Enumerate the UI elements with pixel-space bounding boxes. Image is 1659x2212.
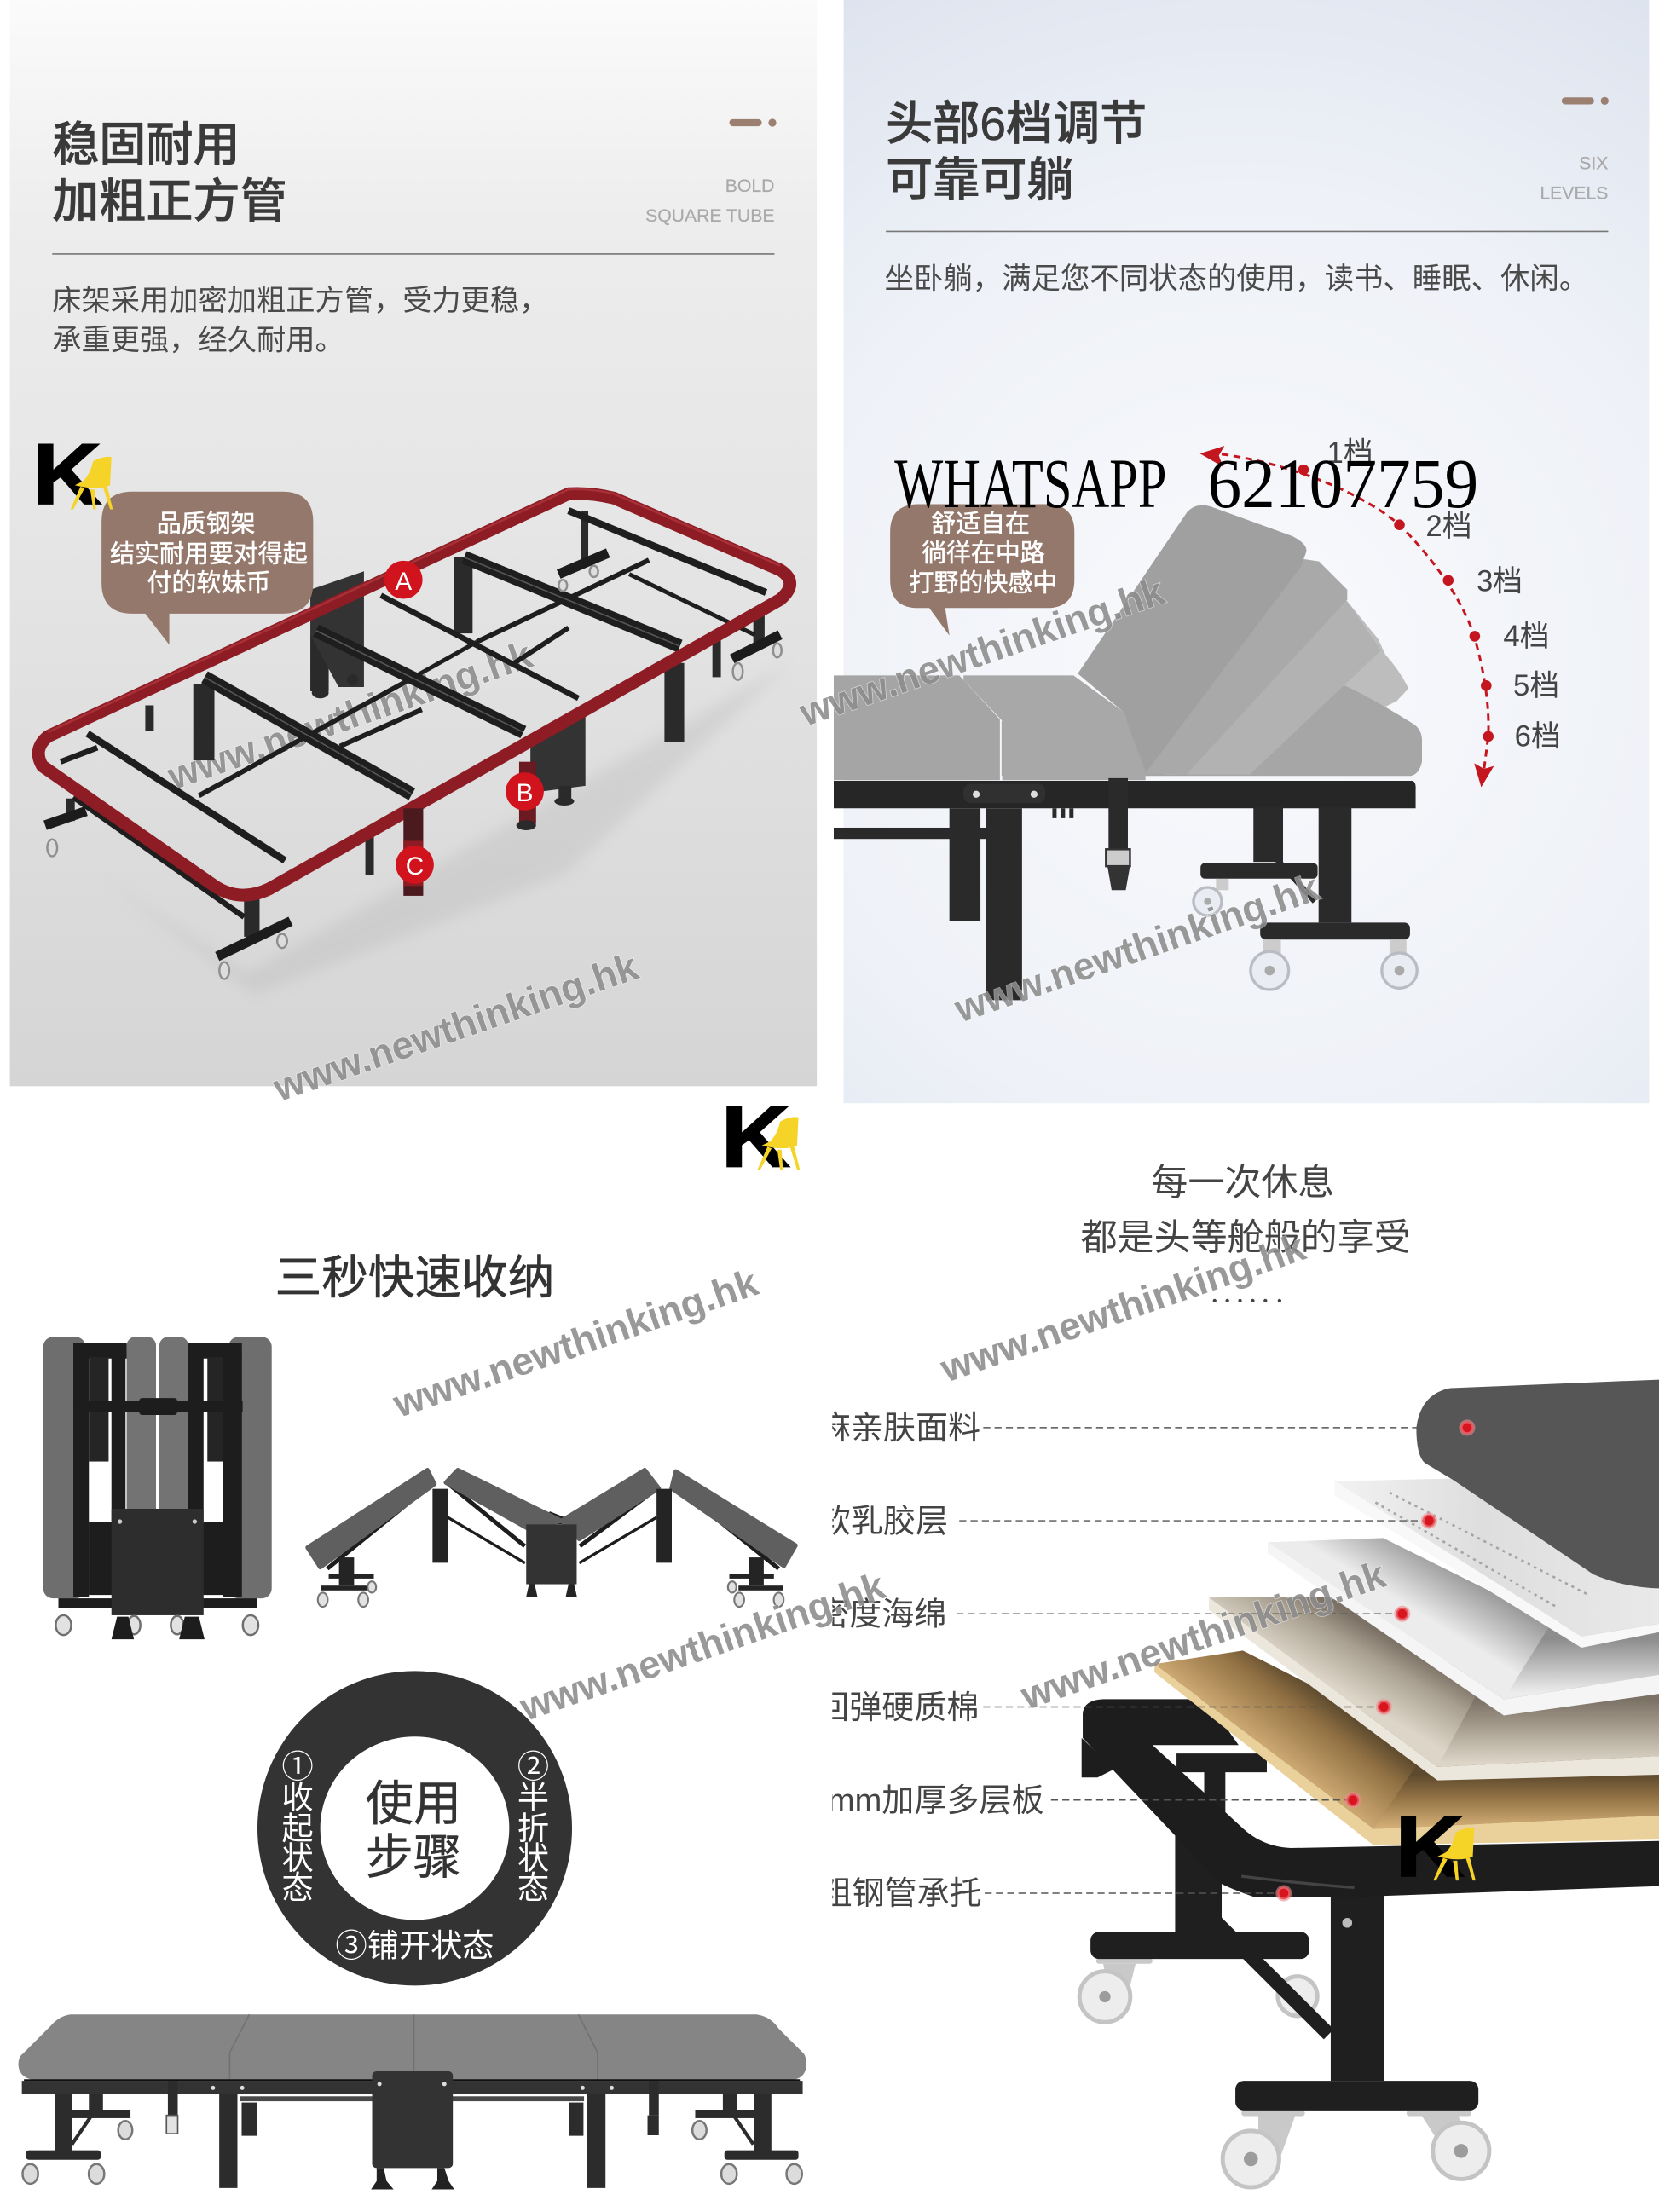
description text: 坐卧躺，满足您不同状态的使用，读书、睡眠、休闲。 <box>885 263 1588 295</box>
fabric cushion layer <box>1416 1380 1659 1589</box>
english subtitle <box>645 176 774 226</box>
step 2: 状 <box>517 1840 549 1876</box>
layer labels: 高密度海绵 <box>784 1597 946 1633</box>
marker B: B <box>517 779 534 807</box>
step 1: 态 <box>282 1870 314 1906</box>
heading: 6 level headrest: 头部6档调节 <box>886 97 1147 150</box>
watermarks: www.newthinking.hk <box>514 1563 891 1730</box>
description text: 承重更强，经久耐用。 <box>52 324 344 356</box>
heading: 6 level headrest <box>886 97 1147 206</box>
level labels: 5档 <box>1513 669 1559 702</box>
ring centre text: 使用 <box>366 1776 461 1830</box>
layer labels: 亚麻亲肤面料 <box>786 1411 980 1447</box>
speech bubble: quality steel frame: 品质钢架 <box>157 511 255 538</box>
panel: mattress layers <box>784 1163 1659 2187</box>
heading: first class rest: 每一次休息 <box>1151 1163 1334 1204</box>
marker C: C <box>406 852 424 881</box>
marker C <box>396 846 434 884</box>
accent mark <box>730 118 777 127</box>
heading: sturdy square tube: 稳固耐用 <box>52 118 240 171</box>
speech bubble: comfort <box>890 504 1074 636</box>
marker B <box>506 772 544 811</box>
step 2: 态 <box>517 1870 549 1906</box>
wood board layer <box>1154 1650 1659 1845</box>
layer labels <box>832 1412 1043 1908</box>
step 1: 状 <box>282 1840 314 1876</box>
speech bubble: comfort: 打野的快感中 <box>910 569 1057 597</box>
heading: three second storage: 三秒快速收纳 <box>275 1252 554 1304</box>
watermarks: www.newthinking.hk <box>267 944 644 1110</box>
description text <box>52 285 548 356</box>
frame and casters <box>1079 1699 1659 2187</box>
foam layer <box>1268 1538 1659 1715</box>
step 2: 半 <box>517 1780 549 1816</box>
level labels: 2档 <box>1425 510 1471 543</box>
layer labels: 15mm加厚多层板 <box>792 1783 1044 1819</box>
heading: 6 level headrest: 可靠可躺 <box>886 153 1074 206</box>
watermarks: www.newthinking.hk <box>387 1260 764 1426</box>
watermark behind frame: www.newthinking.hk <box>161 632 538 799</box>
ring centre text: 步骤 <box>366 1830 461 1884</box>
watermarks <box>267 569 1391 1730</box>
watermarks: www.newthinking.hk <box>794 569 1171 735</box>
level labels: 1档 <box>1327 436 1373 470</box>
level labels: 3档 <box>1477 564 1523 598</box>
step 2 <box>517 1748 549 1906</box>
logo: K chair: K <box>1396 1799 1465 1895</box>
flat open bed illustration <box>19 2014 806 2190</box>
english subtitle: BOLD <box>725 176 774 196</box>
step 2: ② <box>517 1748 549 1784</box>
step 1: 收 <box>282 1780 314 1816</box>
watermarks: www.newthinking.hk <box>1014 1552 1391 1718</box>
marker A <box>384 561 423 599</box>
accent mark <box>1562 97 1609 105</box>
dashed leader lines <box>957 1428 1467 1893</box>
level labels: 6档 <box>1515 719 1561 753</box>
step 1: 起 <box>282 1811 314 1846</box>
speech bubble: comfort: 舒适自在 <box>931 511 1030 538</box>
whatsapp contact text: 62107759 <box>1207 444 1478 523</box>
speech bubble: comfort: 徜徉在中路 <box>922 540 1045 568</box>
speech bubble: quality steel frame: 结实耐用要对得起 <box>110 541 308 569</box>
logo: K chair: K <box>721 1090 790 1186</box>
watermarks: www.newthinking.hk <box>934 1225 1311 1391</box>
step 1 <box>282 1748 314 1906</box>
panel: quick folding <box>19 1090 806 2190</box>
english subtitle <box>1540 154 1608 203</box>
red steel bed frame <box>38 489 790 995</box>
folded bed illustration <box>43 1337 272 1639</box>
description text: 床架采用加密加粗正方管，受力更稳， <box>52 285 548 317</box>
heading: sturdy square tube <box>52 118 287 228</box>
step 2: 折 <box>517 1811 549 1846</box>
cotton layer <box>1209 1597 1659 1781</box>
heading: first class rest <box>1081 1163 1411 1258</box>
marker A: A <box>395 568 412 596</box>
heading: sturdy square tube: 加粗正方管 <box>52 175 287 228</box>
layer labels: 柔软乳胶层 <box>786 1504 948 1539</box>
heading: first class rest: 都是头等舱般的享受 <box>1081 1217 1411 1258</box>
latex layer <box>1334 1478 1659 1648</box>
step 3: ③铺开状态 <box>335 1927 494 1963</box>
speech bubble: quality steel frame: 付的软妹币 <box>147 569 270 597</box>
speech bubble: quality steel frame <box>101 492 313 644</box>
usage steps ring <box>257 1671 572 1985</box>
half folded bed illustration <box>308 1470 795 1607</box>
ring centre text <box>366 1776 461 1884</box>
panel: bold square tube <box>10 0 817 1086</box>
layer labels: 加粗钢管承托 <box>787 1876 982 1912</box>
whatsapp contact text <box>894 444 1478 523</box>
side view bed with reclining headrest <box>834 505 1422 1000</box>
logo: K chair: K <box>32 427 101 523</box>
panel: six levels headrest <box>834 0 1649 1103</box>
step 1: ① <box>282 1748 314 1784</box>
layer labels: 高回弹硬质棉 <box>784 1690 979 1726</box>
red dashed adjustment arrow <box>1200 446 1494 787</box>
level labels: 4档 <box>1503 620 1549 653</box>
ellipsis dots <box>1213 1299 1281 1302</box>
watermarks: www.newthinking.hk <box>949 865 1326 1031</box>
english subtitle: LEVELS <box>1540 183 1608 203</box>
english subtitle: SIX <box>1579 154 1608 174</box>
whatsapp contact text: WHATSAPP <box>894 444 1166 523</box>
level labels <box>1327 436 1561 753</box>
red layer markers <box>1277 1421 1473 1899</box>
english subtitle: SQUARE TUBE <box>645 206 774 226</box>
